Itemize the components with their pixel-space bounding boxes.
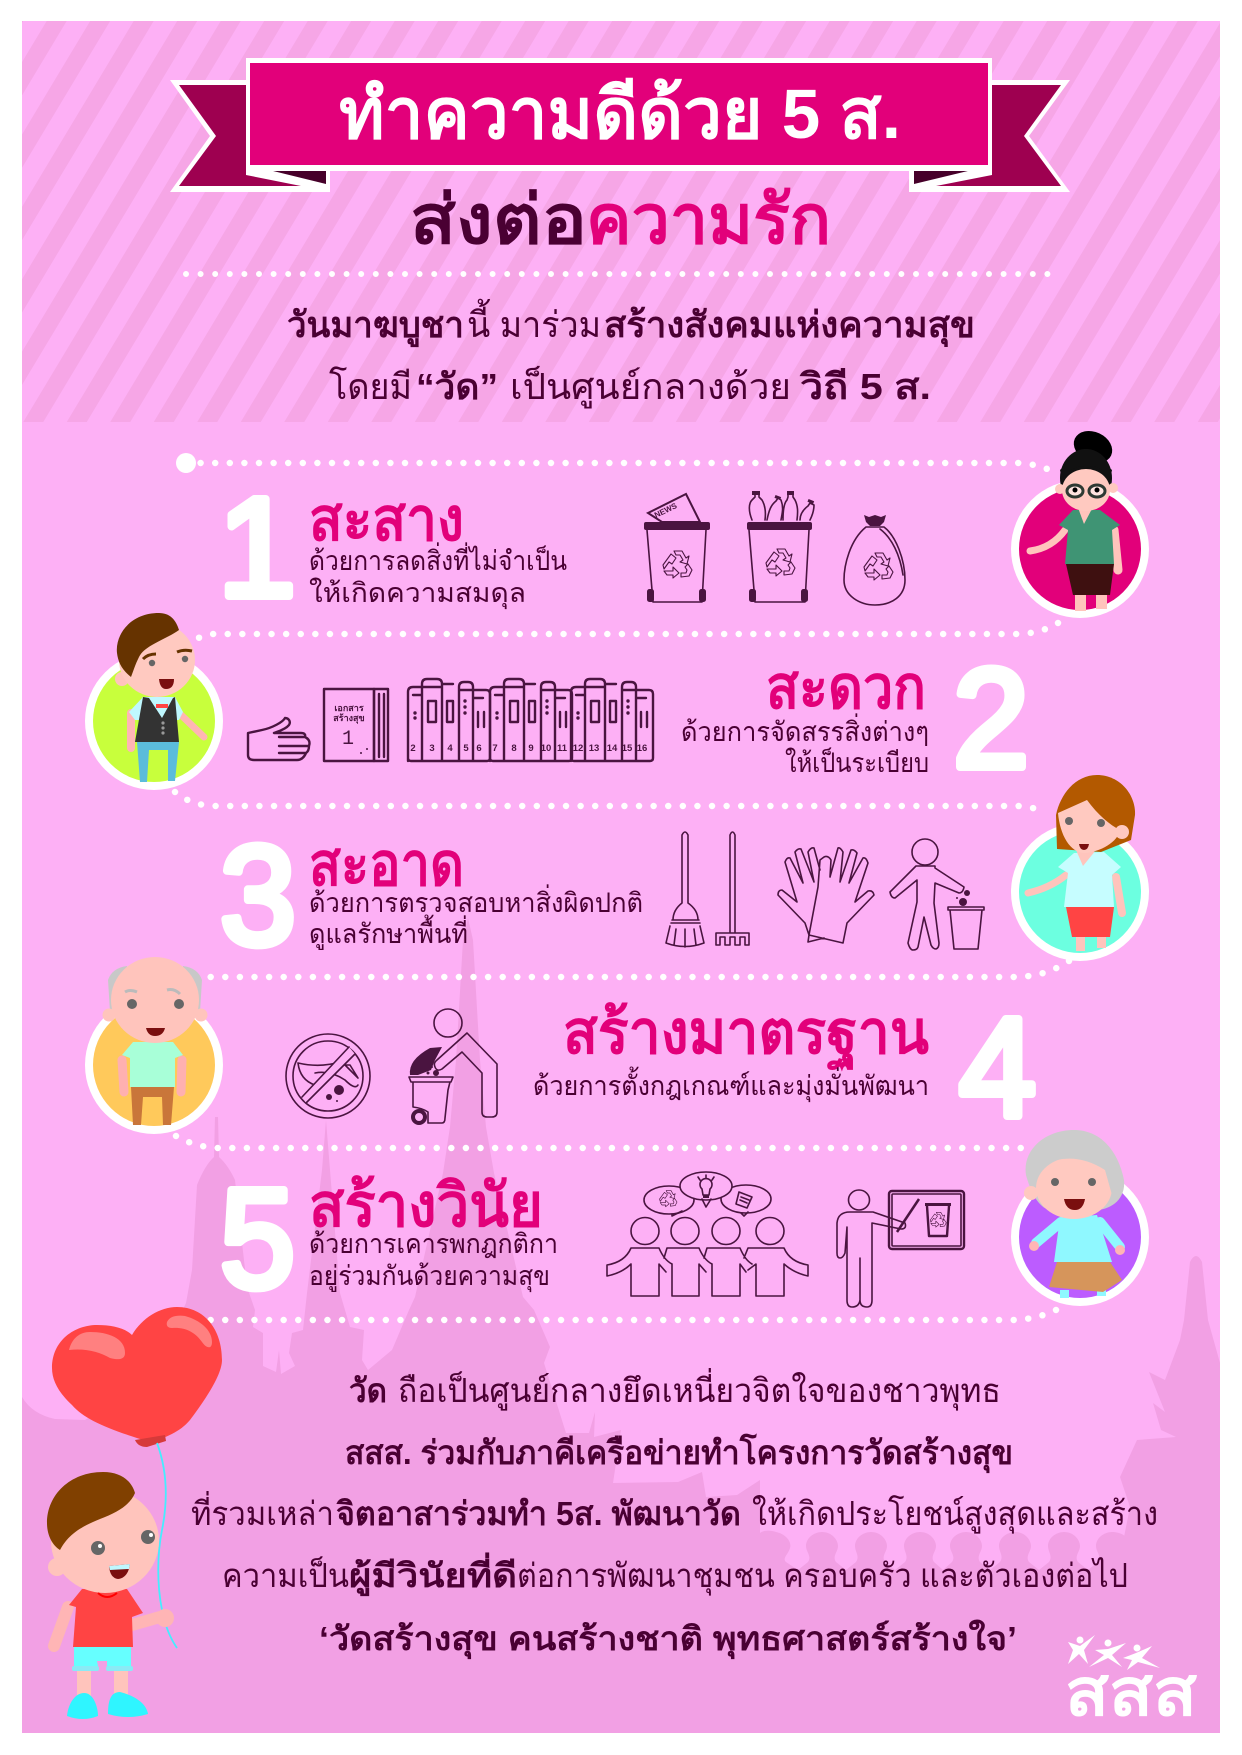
character 3: woman with red skirt bbox=[1011, 775, 1149, 961]
subtitle: ส่งต่อ bbox=[410, 182, 587, 258]
icon: gloves bbox=[778, 848, 874, 943]
character 2: man in vest bbox=[85, 613, 223, 790]
number 3: 3 bbox=[220, 816, 296, 974]
closing paragraph: ที่รวมเหล่า bbox=[191, 1491, 334, 1532]
character 5: grandmother bbox=[1011, 1130, 1149, 1306]
step 1 bbox=[218, 468, 905, 626]
closing paragraph: ผู้มีวินัยที่ดี bbox=[349, 1552, 517, 1597]
description bbox=[681, 713, 929, 778]
icon: row of binders: 8 bbox=[511, 743, 517, 754]
icon: row of binders: 14 bbox=[607, 743, 618, 754]
intro text: โดยมี bbox=[329, 366, 412, 407]
dotted path connecting steps bbox=[175, 453, 1069, 1320]
ribbon main bbox=[246, 58, 992, 171]
icon: row of binders: 3 bbox=[429, 743, 435, 754]
icon: row of binders: 13 bbox=[589, 743, 599, 754]
icon: person putting trash in bin bbox=[409, 1009, 497, 1123]
number 2: 2 bbox=[953, 639, 1029, 797]
logo figures bbox=[1068, 1635, 1160, 1670]
number 1: 1 bbox=[218, 468, 296, 626]
closing paragraph: ความเป็น bbox=[222, 1556, 349, 1594]
subtitle bbox=[410, 182, 831, 258]
closing paragraph: ให้เกิดประโยชน์สูงสุดและสร้าง bbox=[752, 1495, 1158, 1534]
icon: person throwing litter bbox=[890, 839, 984, 950]
step 4 bbox=[286, 988, 1036, 1146]
heading: sa ard: สะอาด bbox=[309, 831, 464, 898]
icon: row of binders: 5 bbox=[463, 743, 469, 754]
heading: sa duak: สะดวก bbox=[766, 654, 926, 721]
temple silhouette background bbox=[22, 918, 1220, 1733]
heading: sang matrathan: สร้างมาตรฐาน bbox=[563, 999, 929, 1071]
icon: document folder: 1 bbox=[342, 728, 354, 751]
intro text: “วัด” bbox=[416, 366, 498, 407]
number 4: 4 bbox=[959, 988, 1036, 1146]
icon: recycle bin with newspaper: NEWS bbox=[653, 501, 679, 520]
icon: row of binders: 7 bbox=[492, 743, 498, 754]
intro text: เป็นศูนย์กลางด้วย bbox=[510, 364, 791, 409]
description: ด้วยการตรวจสอบหาสิ่งผิดปกติ bbox=[309, 884, 643, 918]
description: อยู่ร่วมกันด้วยความสุข bbox=[309, 1261, 550, 1293]
icon: hand bbox=[248, 718, 310, 760]
icon: garbage bag bbox=[844, 515, 905, 605]
description: ด้วยการลดสิ่งที่ไม่จำเป็น bbox=[309, 542, 567, 576]
logo text: สสส bbox=[1065, 1655, 1198, 1729]
ribbon banner bbox=[170, 58, 1070, 192]
intro text bbox=[287, 298, 975, 409]
description bbox=[309, 542, 567, 610]
closing paragraph: ต่อการพัฒนาชุมชน ครอบครัว และตัวเองต่อไป bbox=[517, 1557, 1128, 1596]
title: ทำความดีด้วย 5 ส. bbox=[339, 75, 901, 153]
heart balloon bbox=[52, 1307, 222, 1648]
icon: teacher at board bbox=[837, 1190, 964, 1307]
ribbon left tail bbox=[170, 80, 330, 192]
icon: document folder bbox=[324, 689, 388, 761]
logo: ThaiHealth bbox=[1065, 1635, 1198, 1729]
icon: row of binders bbox=[408, 679, 653, 761]
heading: sang winai: สร้างวินัย bbox=[309, 1172, 543, 1239]
icon: broom bbox=[666, 832, 704, 947]
icon: group with speech bubbles bbox=[607, 1172, 808, 1296]
icon: row of binders: 12 bbox=[573, 743, 583, 754]
icon: no littering sign bbox=[286, 1034, 370, 1118]
icon: document folder: เอกสาร bbox=[334, 703, 364, 713]
closing paragraph: จิตอาสาร่วมทำ 5ส. พัฒนาวัด bbox=[336, 1495, 741, 1532]
dotted divider bbox=[186, 271, 1052, 277]
intro text: วิถี 5 ส. bbox=[799, 366, 931, 407]
icon: row of binders: 10 bbox=[541, 743, 551, 754]
icon: row of binders: 9 bbox=[528, 743, 534, 754]
icon: row of binders: 2 bbox=[410, 743, 416, 754]
step 5 bbox=[220, 1159, 964, 1317]
step 3 bbox=[220, 816, 984, 974]
character 1: woman with glasses bbox=[1011, 425, 1149, 618]
description: ให้เป็นระเบียบ bbox=[785, 745, 929, 778]
closing paragraph: ถือเป็นศูนย์กลางยึดเหนี่ยวจิตใจของชาวพุทธ bbox=[398, 1368, 1001, 1411]
description: ดูแลรักษาพื้นที่ bbox=[309, 914, 468, 950]
boy holding balloon bbox=[47, 1472, 174, 1719]
icon: row of binders: 4 bbox=[447, 743, 453, 754]
closing paragraph: ‘วัดสร้างสุข คนสร้างชาติ พุทธศาสตร์สร้างใจ’ bbox=[319, 1619, 1017, 1660]
icon: row of binders: 11 bbox=[557, 743, 568, 754]
description: ให้เกิดความสมดุล bbox=[309, 577, 526, 610]
step 2 bbox=[248, 639, 1029, 797]
closing paragraph bbox=[191, 1368, 1158, 1660]
character 4: old man bbox=[85, 957, 223, 1134]
icon: document folder: สร้างสุข bbox=[333, 713, 365, 724]
number 5: 5 bbox=[220, 1159, 295, 1317]
description: ด้วยการจัดสรรสิ่งต่างๆ bbox=[681, 713, 929, 747]
subtitle: ความรัก bbox=[586, 182, 831, 258]
ribbon right tail bbox=[909, 80, 1070, 192]
heading: sa sang: สะสาง bbox=[309, 486, 464, 553]
icon: recycle bin with bottles bbox=[747, 491, 814, 602]
icon: row of binders: 15 bbox=[622, 743, 633, 754]
intro text: นี้ มาร่วม bbox=[467, 298, 601, 345]
icon: row of binders: 6 bbox=[476, 743, 482, 754]
diagonal stripes behind header bbox=[22, 21, 1220, 422]
description: ด้วยการเคารพกฎกติกา bbox=[309, 1229, 558, 1259]
intro text: สร้างสังคมแห่งความสุข bbox=[604, 304, 975, 348]
icon: recycle bin with newspaper bbox=[644, 494, 710, 602]
description bbox=[309, 884, 643, 950]
intro text: วันมาฆบูชา bbox=[287, 304, 464, 348]
closing paragraph: สสส. ร่วมกับภาคีเครือข่ายทำโครงการวัดสร้างสุข bbox=[345, 1433, 1013, 1474]
icon: row of binders: 16 bbox=[637, 743, 647, 754]
description: ด้วยการตั้งกฎเกณฑ์และมุ่งมั่นพัฒนา bbox=[533, 1066, 929, 1103]
closing paragraph: วัด bbox=[349, 1372, 387, 1409]
description bbox=[309, 1229, 558, 1293]
icon: rake bbox=[716, 832, 749, 945]
